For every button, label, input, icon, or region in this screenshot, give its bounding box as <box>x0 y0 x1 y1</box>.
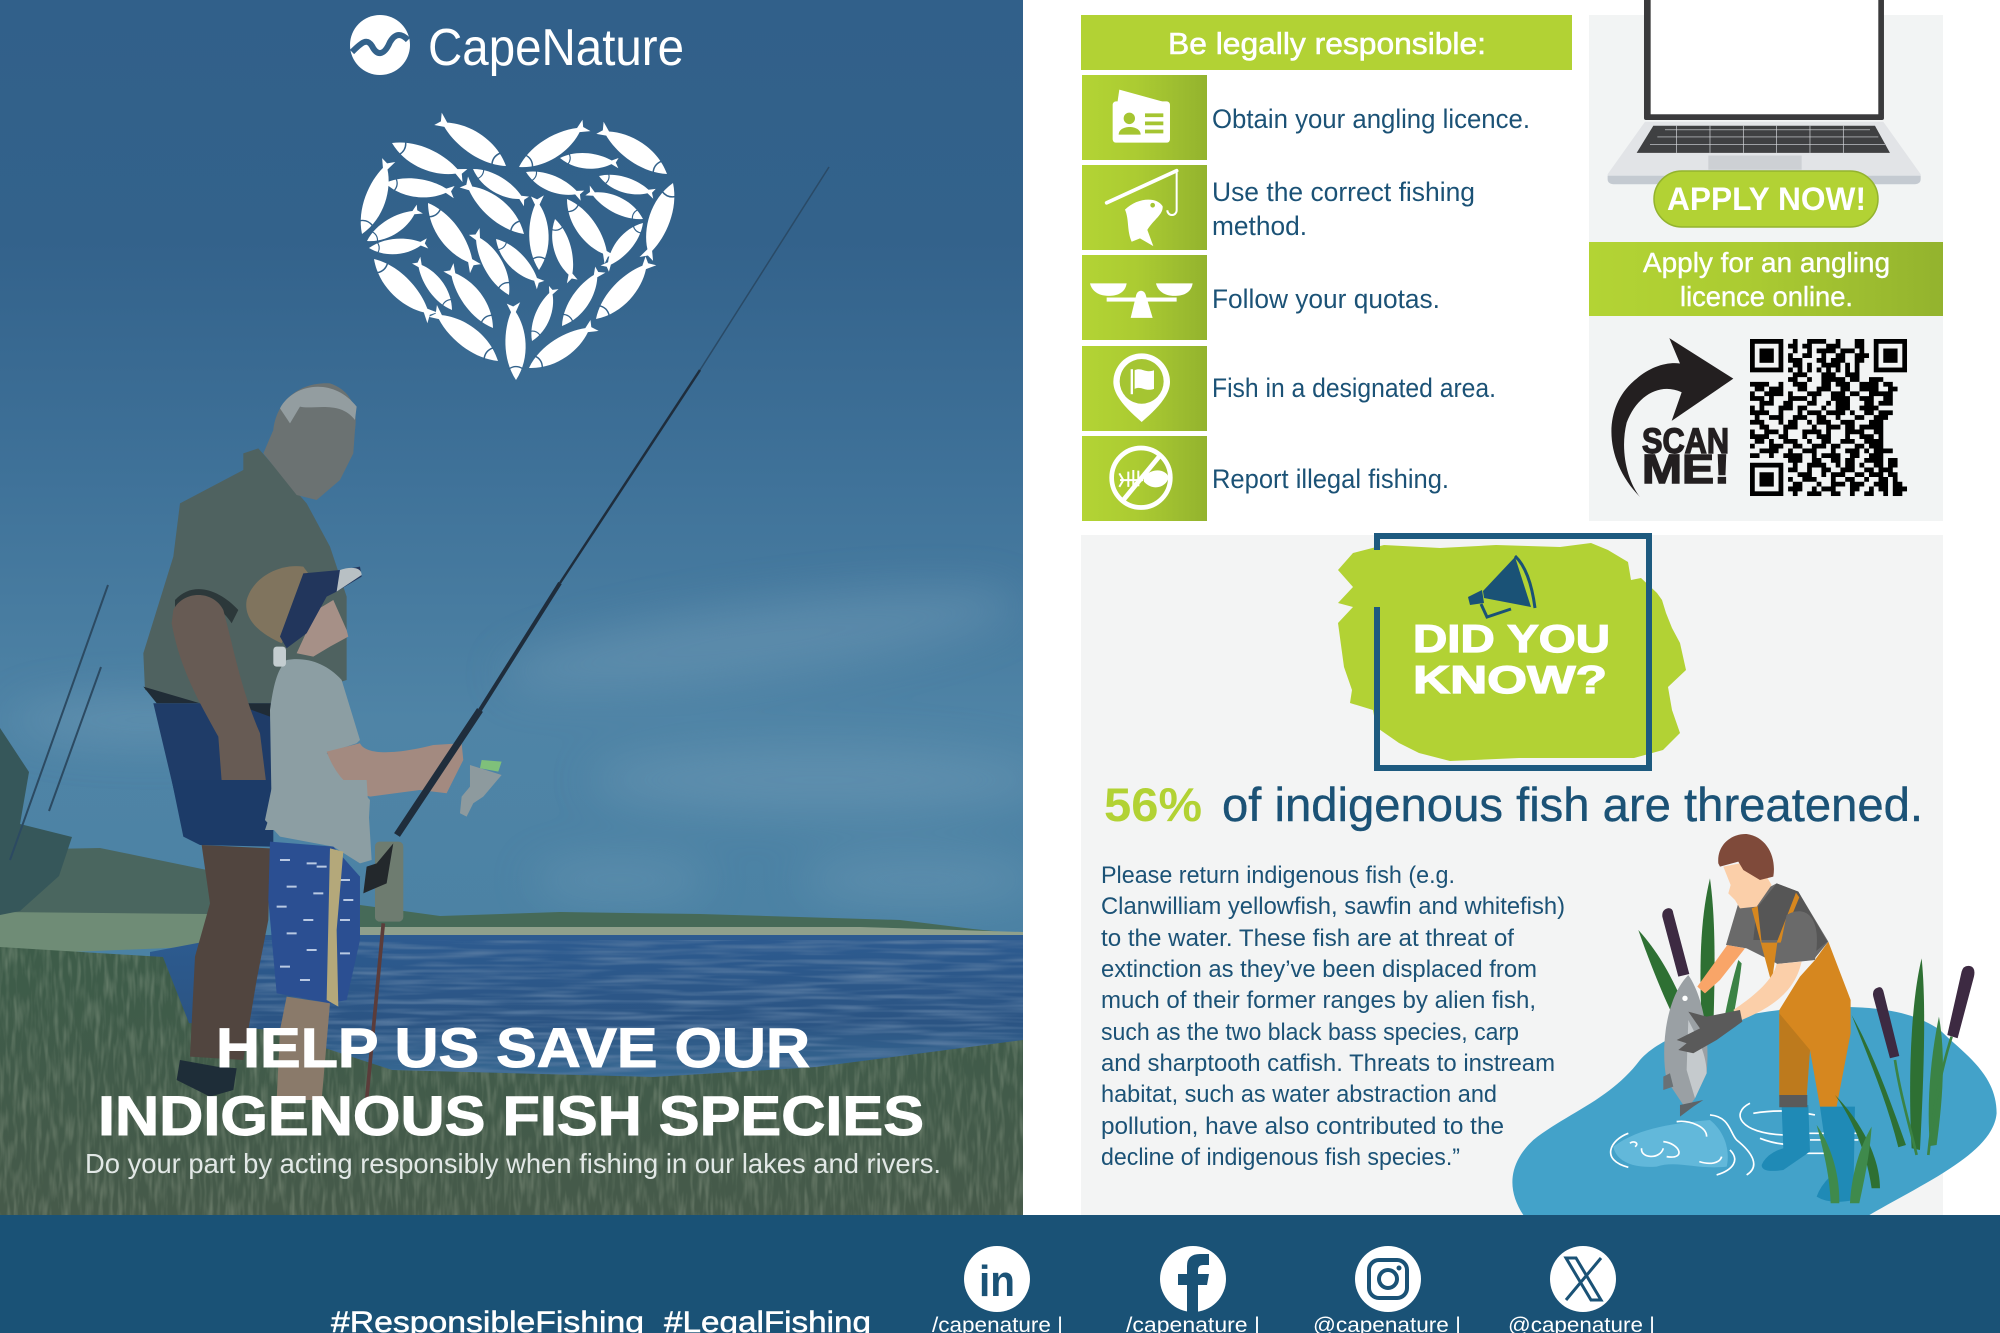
panel background <box>1589 15 1943 521</box>
photo: water ripples <box>240 940 1023 1080</box>
band: apply for a licence <box>1589 242 1943 316</box>
logo wordmark: CapeNature <box>428 19 684 77</box>
boots <box>1762 1105 1855 1202</box>
photo: spinning reel <box>460 760 502 817</box>
text block: explanation: Clanwilliam yellowfish, sawfin and whitefish) <box>1101 893 1565 920</box>
text: scan me: SCAN <box>1642 422 1729 461</box>
hair <box>1718 834 1774 880</box>
sleeve <box>1777 911 1817 964</box>
glove <box>1677 1010 1742 1053</box>
QR code <box>1750 341 1907 494</box>
frame <box>1377 536 1649 768</box>
social: linkedin <box>932 1246 1063 1333</box>
boot cuff <box>1779 1095 1807 1107</box>
logo mark <box>350 15 410 75</box>
item: report illegal fishing: Report illegal fishing. <box>1212 464 1449 494</box>
item: licence <box>1082 75 1530 160</box>
item: designated area: Fish in a designated area. <box>1212 373 1496 403</box>
text block: explanation: Please return indigenous fish (e.g. <box>1101 862 1455 889</box>
photo: lake water <box>150 935 1023 1077</box>
text block: explanation <box>1101 862 1565 1171</box>
text block: explanation: to the water. These fish are at threat of <box>1101 925 1514 952</box>
cattails right <box>1873 966 1974 1058</box>
rod holder tube <box>375 842 403 922</box>
photo: fishing rods in the background <box>10 585 108 860</box>
footer band <box>0 1215 2000 1333</box>
waders body <box>1779 942 1851 1107</box>
logo: CapeNature <box>350 15 684 77</box>
fish <box>1663 975 1707 1117</box>
photo: trees at left edge <box>0 728 72 915</box>
item: fishing method: method. <box>1212 211 1307 241</box>
item: quotas <box>1082 255 1440 340</box>
cattail left <box>1662 908 1689 977</box>
pond <box>1512 1007 1997 1217</box>
item: quotas: Follow your quotas. <box>1212 284 1440 314</box>
boy shirt <box>265 659 370 830</box>
boy face <box>297 600 348 657</box>
man shirt <box>143 448 347 703</box>
heading: Be legally responsible: <box>1168 26 1486 61</box>
social: X <box>1508 1246 1655 1333</box>
text block: explanation: extinction as they’ve been displaced from <box>1101 956 1537 983</box>
text block: explanation: pollution, have also contributed to the <box>1101 1113 1504 1140</box>
hashtags <box>331 1306 871 1333</box>
shorts pattern <box>277 860 353 980</box>
photo: distant shore sand <box>360 927 1023 935</box>
band: apply for a licence: Apply for an angling <box>1643 247 1890 278</box>
arm near <box>1733 962 1802 1020</box>
boy hair <box>246 566 308 643</box>
text block: explanation: much of their former ranges by alien fish, <box>1101 987 1536 1014</box>
text block: explanation: habitat, such as water abstraction and <box>1101 1081 1497 1108</box>
panel: did you know <box>1081 535 1997 1217</box>
face <box>1723 863 1772 908</box>
photo: grass texture <box>0 940 1023 1215</box>
heading: did you know: DID YOU <box>1413 618 1610 661</box>
boy leg <box>277 997 330 1100</box>
title: INDIGENOUS FISH SPECIES <box>98 1084 924 1147</box>
item: report illegal fishing <box>1082 436 1449 521</box>
boy arm <box>327 743 463 797</box>
man leg <box>190 845 270 1060</box>
icon: curved arrow <box>1611 338 1733 497</box>
panel: fishing photo background <box>0 0 1050 1215</box>
boy shorts <box>268 842 360 1003</box>
band: apply for a licence: licence online. <box>1680 281 1853 312</box>
social: facebook <box>1126 1246 1260 1333</box>
photo: distant shore trees <box>360 905 997 932</box>
vest dark <box>1753 883 1827 953</box>
heading bar <box>1081 15 1572 70</box>
cap visor <box>337 568 362 592</box>
ripples <box>1611 1103 1858 1175</box>
photo: grandfather lower body <box>172 780 273 1097</box>
boy cap <box>280 567 362 648</box>
man shorts <box>172 780 273 847</box>
button: apply now <box>1654 171 1878 227</box>
panel: legally responsible list <box>1081 15 1572 521</box>
title <box>98 1016 924 1147</box>
photo: grandson lower body <box>265 780 403 1100</box>
statistic: 56 percent: of indigenous fish are threatened. <box>1222 778 1923 831</box>
item: fishing method <box>1082 165 1475 250</box>
title: HELP US SAVE OUR <box>216 1016 810 1079</box>
icon: megaphone <box>1468 556 1535 617</box>
subtitle: Do your part by acting responsibly when fishing in our lakes and rivers. <box>85 1148 941 1179</box>
icon: laptop <box>1608 0 1921 184</box>
photo: distant hill <box>14 848 210 914</box>
rod butt <box>363 843 393 893</box>
cap tag <box>273 647 286 667</box>
boy shirt lower <box>265 780 372 863</box>
photo: field <box>0 912 207 952</box>
panel background <box>1081 535 1943 1215</box>
item: designated area <box>1082 346 1496 431</box>
illustration: fisherman returning a fish <box>1512 834 1997 1217</box>
photo: sky <box>0 0 1023 960</box>
text block: explanation: decline of indigenous fish species.” <box>1101 1144 1460 1171</box>
photo: clouds <box>52 586 1016 902</box>
item: licence: Obtain your angling licence. <box>1212 104 1530 134</box>
panel: apply online <box>1589 0 1943 521</box>
hair <box>280 387 357 423</box>
back reeds <box>1638 878 1742 1077</box>
arm far <box>1697 945 1745 993</box>
shirt <box>1726 883 1828 963</box>
statistic: 56 percent: 56% <box>1104 778 1202 831</box>
text: scan me <box>1642 422 1730 492</box>
text block: explanation: and sharptooth catfish. Threats to instream <box>1101 1050 1555 1077</box>
heading: did you know: KNOW? <box>1413 659 1607 702</box>
shirt hem <box>143 687 273 717</box>
splash: green paint <box>1338 543 1686 761</box>
man shorts upper <box>153 703 273 830</box>
ripple patch <box>1613 1120 1728 1167</box>
apron strap <box>1777 893 1799 943</box>
item: fishing method: Use the correct fishing <box>1212 177 1475 207</box>
front reeds <box>1817 958 1952 1203</box>
heading: did you know <box>1413 618 1610 702</box>
social: instagram <box>1313 1246 1461 1333</box>
shorts stripe <box>327 848 343 1007</box>
head <box>263 383 356 500</box>
button: apply now: APPLY NOW! <box>1667 181 1866 217</box>
text block: explanation: such as the two black bass species, carp <box>1101 1019 1519 1046</box>
wader shade <box>1779 1013 1810 1097</box>
sleeve shade <box>175 589 238 623</box>
photo: grass bank <box>0 947 1023 1215</box>
apron bib <box>1752 906 1777 983</box>
man arm <box>172 595 266 780</box>
photo: grandson upper body <box>246 566 463 830</box>
photo: fishing rod <box>397 167 829 835</box>
icon: heart made of white fish <box>353 109 682 380</box>
social: linkedin: in <box>979 1257 1015 1306</box>
holder stake <box>367 923 383 1100</box>
text: scan me: ME! <box>1642 446 1730 492</box>
photo: grandfather upper body <box>143 383 357 830</box>
man shoe <box>177 1060 237 1097</box>
